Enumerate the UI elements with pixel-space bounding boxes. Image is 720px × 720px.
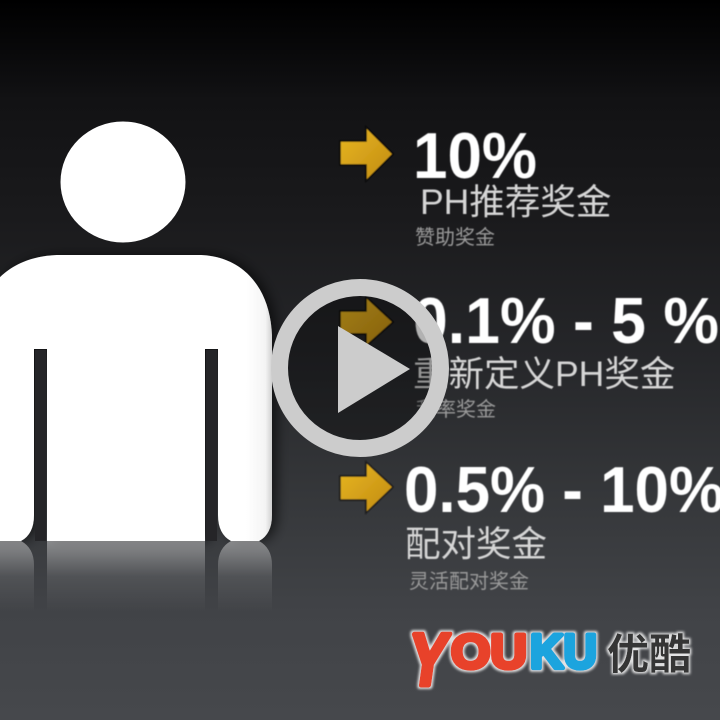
sublabel 赞助奖金: 赞助奖金 [415,226,495,249]
item: 10% sponsor bonus [340,119,611,249]
logo letter Y: Y [403,620,453,702]
figure body with arms [0,255,272,541]
play button ring [280,288,440,448]
label 重新定义PH奖金: 重新定义PH奖金 [413,354,675,394]
logo letters OU: OU [451,626,527,679]
logo: YOUKU watermark [403,620,691,702]
right arm gap [206,350,217,541]
icon: gold arrow 1 [340,127,393,181]
percent 10%: 10% [413,119,537,192]
label 配对奖金: 配对奖金 [405,524,547,564]
play button inner disc [287,295,433,441]
label PH推荐奖金: PH推荐奖金 [420,182,611,222]
play triangle [338,326,410,413]
icon: white person figure [0,122,272,612]
logo letters KU: KU [530,626,597,679]
sublabel 利率奖金: 利率奖金 [416,398,496,421]
logo chinese name: 优酷 [607,631,691,678]
item: 0.5% - 10% pairing bonus [340,453,720,593]
left arm gap [35,350,46,541]
icon: gold arrow 2 [340,297,393,346]
sublabel 灵活配对奖金: 灵活配对奖金 [409,570,529,593]
item: 0.1% - 5% redefined PH bonus [340,284,719,421]
figure head [60,122,186,242]
figure floor reflection [0,541,272,612]
icon: gold arrow 3 [340,462,393,513]
icon: video play button [280,288,440,448]
